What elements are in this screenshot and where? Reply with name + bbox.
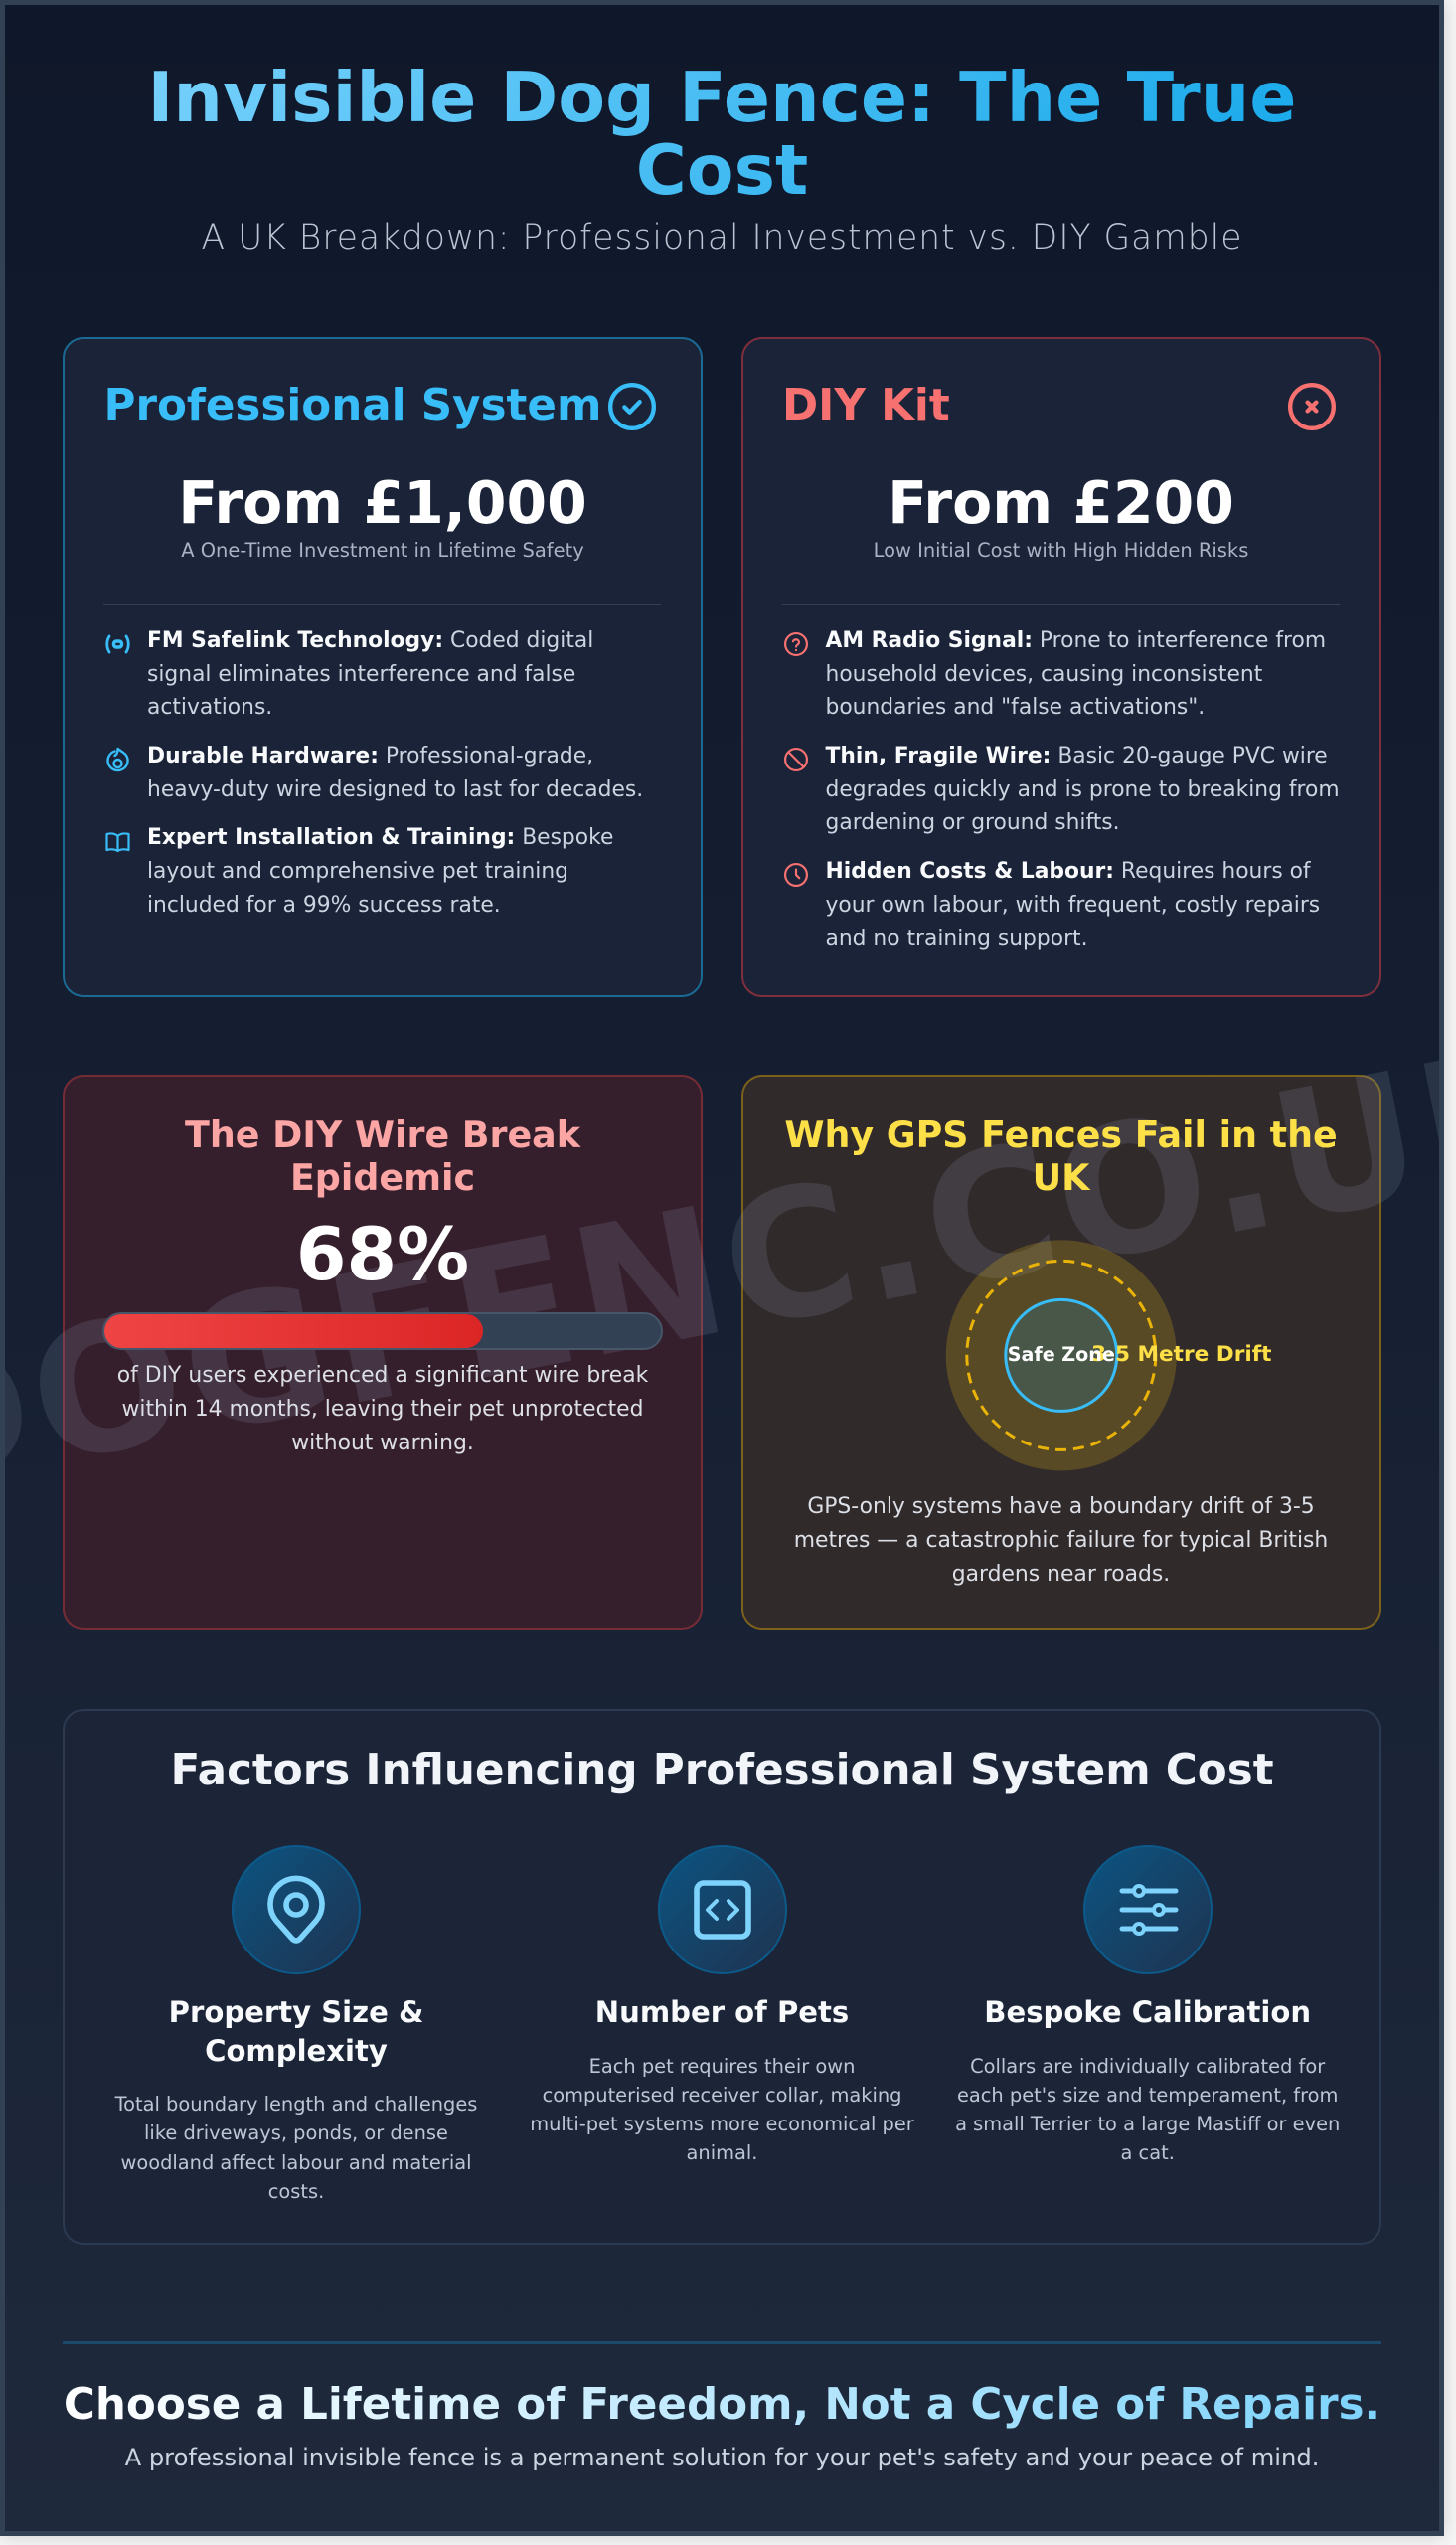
factor text: property: like driveways, ponds, or dense [144, 2121, 448, 2144]
feature: hidden costs: Hidden Costs & Labour: Requires hours of [825, 859, 1311, 884]
factor text: property [115, 2093, 477, 2203]
factor text: pets: computerised receiver collar, making [543, 2084, 901, 2107]
factor text: pets: multi-pet systems more economical per [530, 2113, 914, 2135]
feature: fm safelink: FM Safelink Technology: Coded digital [147, 628, 593, 653]
stat description: of DIY users experienced a significant wire break [117, 1363, 648, 1388]
price: professional: From £1,000 [178, 469, 587, 537]
factor text: property: costs. [268, 2180, 324, 2203]
progress fill [104, 1314, 483, 1348]
heading: gps: UK [1033, 1156, 1089, 1199]
factor title: property: Property Size & [169, 1994, 423, 2028]
feature: expert installation: included for a 99% success rate. [147, 893, 501, 918]
feature: expert installation: Expert Installation & Training: Bespoke [147, 825, 613, 850]
panel: gps [741, 1075, 1381, 1630]
feature: hidden costs: your own labour, with frequent, costly repairs [825, 893, 1320, 918]
diagram: gps drift [946, 1240, 1177, 1471]
feature: thin wire: degrades quickly and is prone to breaking from [825, 777, 1340, 801]
price note: professional: A One-Time Investment in Lifetime Safety [181, 539, 584, 562]
factor text: pets [530, 2054, 914, 2164]
progress bar [102, 1312, 663, 1350]
icon: durable flame [106, 748, 129, 771]
feature: fm safelink [147, 628, 593, 720]
icon: ban [784, 748, 808, 771]
gps description: GPS-only systems have a boundary drift of 3-5 [807, 1493, 1315, 1519]
icon: question [784, 632, 808, 656]
heading: professional system: Professional System [103, 381, 601, 430]
factor text: calibration: Collars are individually calibrated for [970, 2054, 1325, 2078]
factor text: calibration: each pet's size and temperament, from [957, 2084, 1338, 2107]
feature: fm safelink: activations. [147, 695, 272, 720]
label: safe zone: Safe Zone [1008, 1343, 1115, 1366]
price: diy: From £200 [888, 469, 1234, 537]
heading: wire break: Epidemic [290, 1156, 475, 1199]
title [63, 63, 1381, 207]
icon: check circle [608, 383, 656, 430]
feature: thin wire: gardening or ground shifts. [825, 810, 1120, 835]
feature: am radio: boundaries and "false activations". [825, 695, 1205, 720]
stat description [117, 1363, 648, 1455]
footer headline: Choose a Lifetime of Freedom, Not a Cycle of Repairs. [64, 2380, 1380, 2430]
factor text: calibration: a small Terrier to a large Mastiff or even [955, 2113, 1340, 2135]
icon: clock [784, 863, 808, 887]
factor text: property: Total boundary length and challenges [115, 2093, 477, 2116]
panel: factors [63, 1708, 1381, 2245]
factor text: pets: Each pet requires their own [589, 2054, 855, 2078]
stat description: without warning. [291, 1431, 474, 1455]
heading: diy kit: DIY Kit [782, 381, 950, 430]
icon circle: calibration [1083, 1845, 1213, 1974]
icon circle: pets [658, 1845, 787, 1974]
factor text: calibration [955, 2054, 1340, 2164]
heading: gps [784, 1113, 1338, 1199]
icon: x circle [1288, 383, 1336, 430]
feature: thin wire [825, 744, 1340, 835]
icon: sliders [1119, 1884, 1179, 1936]
heading: factors: Factors Influencing Professional System Cost [170, 1746, 1274, 1795]
title: Cost [636, 130, 808, 211]
feature: am radio: household devices, causing inconsistent [825, 662, 1262, 686]
stat description: within 14 months, leaving their pet unprotected [121, 1397, 643, 1422]
factor title: property: Complexity [205, 2034, 388, 2068]
heading: wire break [185, 1113, 581, 1199]
feature: hidden costs [825, 859, 1320, 951]
factor text: property: woodland affect labour and material [121, 2151, 471, 2174]
feature: thin wire: Thin, Fragile Wire: Basic 20-gauge PVC wire [825, 744, 1328, 768]
icon circle: location [232, 1845, 361, 1974]
factor text: pets: animal. [687, 2141, 757, 2164]
panel: diy kit [741, 337, 1381, 997]
heading: gps: Why GPS Fences Fail in the [784, 1113, 1338, 1156]
icon: signal [105, 634, 130, 654]
feature: hidden costs: and no training support. [825, 927, 1087, 951]
footer subtext: A professional invisible fence is a permanent solution for your pet's safety and your peace of mind. [125, 2444, 1319, 2471]
feature: fm safelink: signal eliminates interference and false [147, 662, 575, 686]
label: drift: 3-5 Metre Drift [1091, 1342, 1272, 1367]
icon: location pin [267, 1875, 325, 1944]
factor text: calibration: a cat. [1121, 2141, 1175, 2164]
factor title: property [169, 1994, 423, 2068]
subtitle: A UK Breakdown: Professional Investment vs. DIY Gamble [202, 218, 1242, 257]
feature: am radio: AM Radio Signal: Prone to interference from [825, 628, 1326, 653]
panel: professional system [63, 337, 703, 997]
icon: code square [694, 1880, 751, 1940]
gps description [794, 1493, 1328, 1587]
panel: wire break [63, 1075, 703, 1630]
icon: open book [105, 832, 130, 853]
gps description: gardens near roads. [952, 1561, 1170, 1587]
factor title: calibration: Bespoke Calibration [984, 1994, 1311, 2028]
heading: wire break: The DIY Wire Break [185, 1113, 580, 1156]
stat: 68 percent: 68% [296, 1213, 469, 1297]
gps description: metres — a catastrophic failure for typical British [794, 1527, 1328, 1553]
factor title: pets: Number of Pets [595, 1994, 849, 2028]
feature: durable hardware [147, 744, 643, 801]
feature: durable hardware: Durable Hardware: Professional-grade, [147, 744, 593, 768]
feature: expert installation [147, 825, 613, 918]
feature: am radio [825, 628, 1326, 720]
price note: diy: Low Initial Cost with High Hidden Risks [874, 539, 1248, 562]
feature: durable hardware: heavy-duty wire designed to last for decades. [147, 777, 643, 801]
feature: expert installation: layout and comprehensive pet training [147, 859, 568, 884]
title: Invisible Dog Fence: The True [147, 58, 1296, 138]
